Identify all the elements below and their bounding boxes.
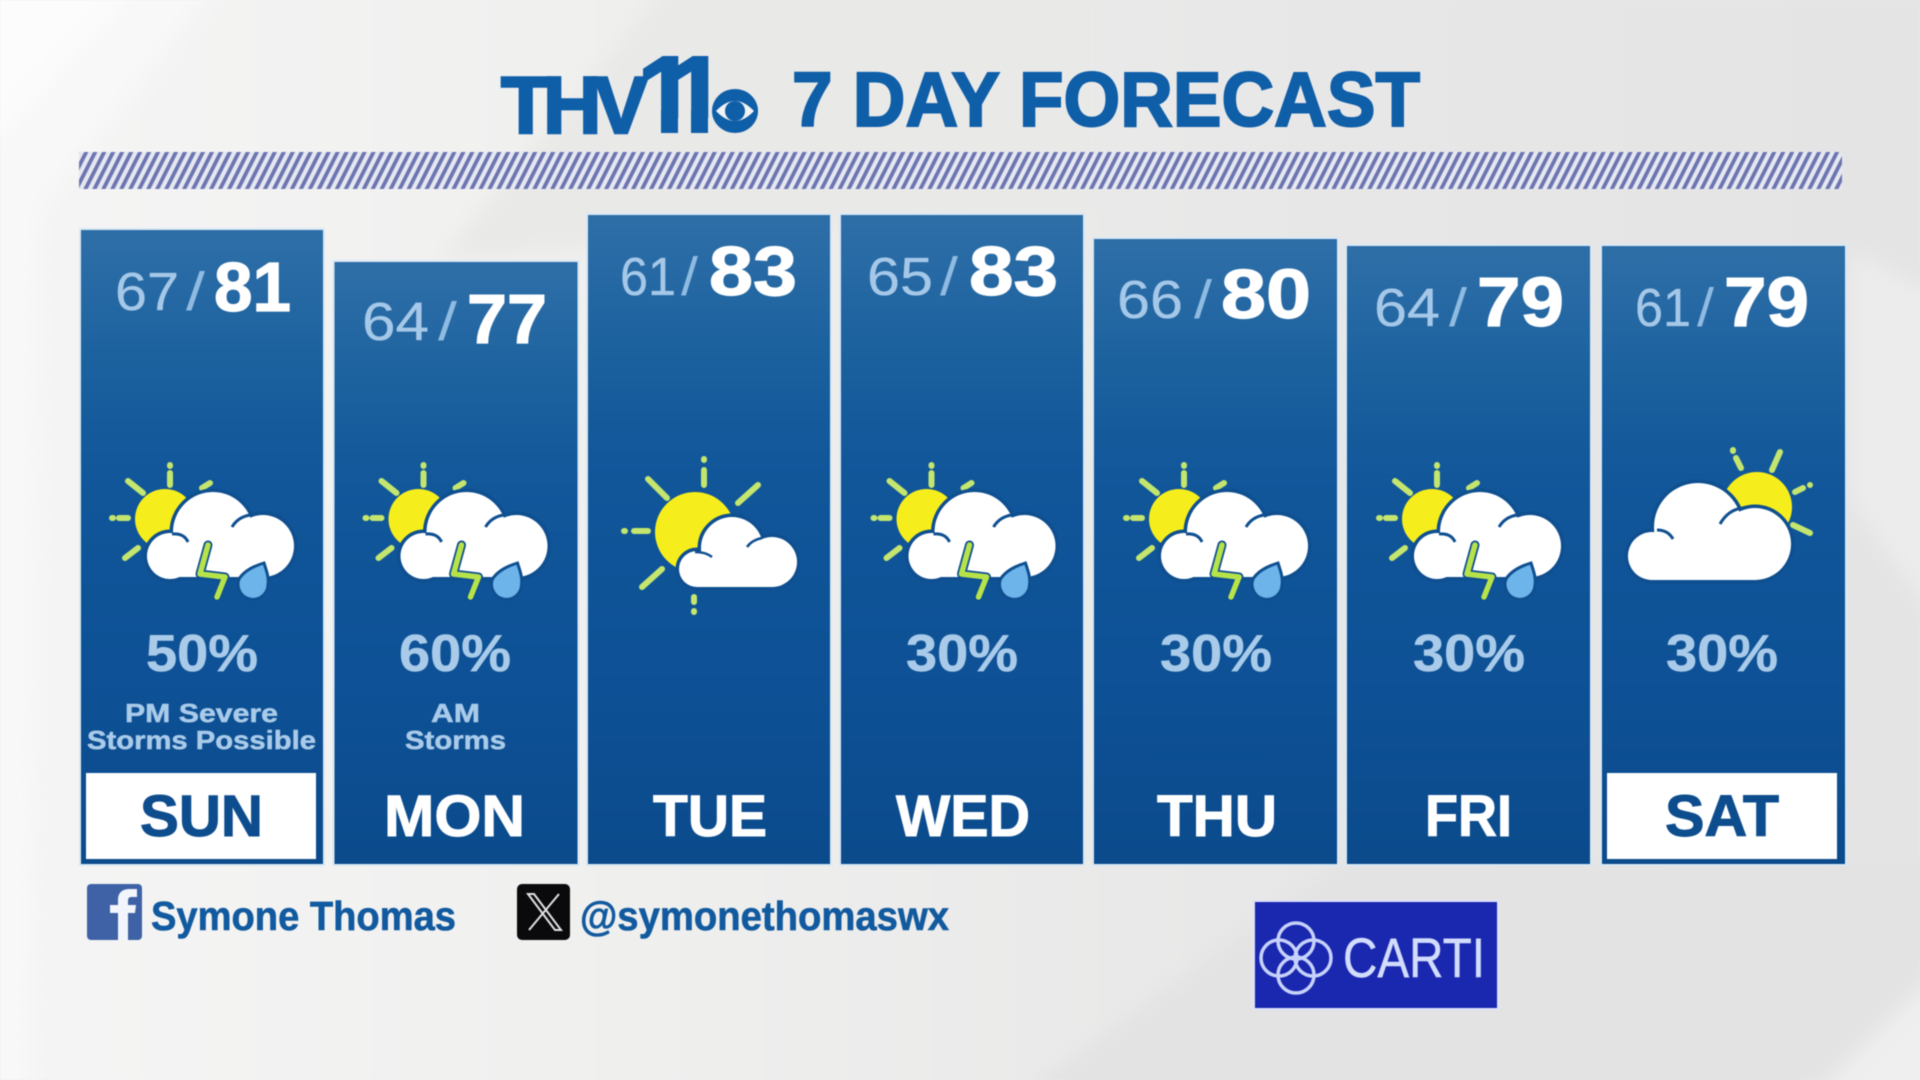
temperatures: Tuesday: 61 <box>620 247 676 307</box>
day label: SUN: SUN <box>140 784 263 849</box>
panel: Sunday <box>80 229 324 865</box>
note: Sunday: Storms Possible <box>87 725 316 755</box>
day label: FRI: FRI <box>1425 784 1512 849</box>
precipitation: Sunday: 50% <box>146 625 258 683</box>
temperatures: Sunday: / <box>186 262 205 322</box>
panel: Tuesday <box>587 214 831 865</box>
Facebook name: Symone Thomas <box>151 893 456 939</box>
temperatures: Monday: 64 <box>362 292 429 352</box>
temperatures: Saturday: 79 <box>1724 263 1809 341</box>
icon: storm Thursday <box>1126 465 1308 599</box>
icon: storm Friday <box>1379 465 1561 599</box>
temperatures: Tuesday: / <box>681 247 698 307</box>
header logo: THV11 CBS: THV <box>501 61 648 151</box>
day label: SAT <box>1607 773 1837 859</box>
title: 7 DAY FORECAST <box>792 57 1420 143</box>
icon: partly cloudy Tuesday <box>624 459 797 612</box>
temperatures: Thursday: 66 <box>1117 270 1183 330</box>
temperatures: Wednesday: 65 <box>867 247 933 307</box>
temperatures: Friday: 79 <box>1477 263 1564 341</box>
note: Sunday <box>87 698 316 755</box>
temperatures: Monday: 77 <box>467 280 547 358</box>
temperatures: Monday <box>362 280 547 358</box>
temperatures: Thursday <box>1117 255 1311 333</box>
temperatures: Saturday: 61 <box>1635 278 1691 338</box>
panel: Wednesday <box>840 214 1084 865</box>
CARTI wordmark: CARTI <box>1343 926 1485 989</box>
temperatures: Wednesday: / <box>940 247 958 307</box>
day label: WED: WED <box>896 784 1030 849</box>
panel: Saturday <box>1601 245 1846 865</box>
note: Monday <box>405 698 506 755</box>
icon: partly cloudy Saturday <box>1628 450 1810 580</box>
note: Monday: AM <box>431 698 480 728</box>
icon: storm Monday <box>366 465 548 599</box>
hatched divider <box>79 152 1842 189</box>
panel: Monday <box>334 261 578 865</box>
temperatures: Tuesday: 83 <box>709 232 797 310</box>
icon: Facebook <box>87 884 142 940</box>
temperatures: Wednesday: 83 <box>969 232 1058 310</box>
panel: Friday <box>1346 245 1591 865</box>
temperatures: Wednesday <box>867 232 1058 310</box>
precipitation: Saturday: 30% <box>1666 625 1778 683</box>
icon: X <box>517 884 570 940</box>
icon: CARTI knot <box>1261 923 1331 993</box>
temperatures: Thursday: / <box>1194 270 1212 330</box>
precipitation: Wednesday: 30% <box>906 625 1018 683</box>
panel: Thursday <box>1093 238 1338 865</box>
day label: TUE: TUE <box>653 784 767 849</box>
day label: MON: MON <box>384 784 525 849</box>
day label: THU: THU <box>1157 784 1277 849</box>
temperatures: Friday: / <box>1449 278 1467 338</box>
sponsor logo: CARTI <box>1254 901 1498 1009</box>
precipitation: Monday: 60% <box>399 625 511 683</box>
icon: storm Sunday <box>112 465 294 599</box>
icon: storm Wednesday <box>874 465 1056 599</box>
note: Monday: Storms <box>405 725 506 755</box>
day label: SUN <box>86 773 316 859</box>
temperatures: Tuesday <box>620 232 797 310</box>
temperatures: Sunday: 67 <box>115 262 179 322</box>
precipitation: Thursday: 30% <box>1160 625 1272 683</box>
header logo: THV11 CBS: 11 <box>636 34 728 157</box>
temperatures: Saturday <box>1635 263 1809 341</box>
note: Sunday: PM Severe <box>125 698 278 728</box>
precipitation: Friday: 30% <box>1413 625 1525 683</box>
temperatures: Thursday: 80 <box>1221 255 1311 333</box>
temperatures: Friday: 64 <box>1374 278 1440 338</box>
header logo: THV11 CBS <box>500 55 759 136</box>
X handle: @symonethomaswx <box>580 893 949 939</box>
temperatures: Monday: / <box>438 292 457 352</box>
day label: SAT: SAT <box>1665 784 1779 849</box>
temperatures: Saturday: / <box>1697 278 1714 338</box>
temperatures: Sunday: 81 <box>214 248 291 326</box>
temperatures: Friday <box>1374 263 1564 341</box>
temperatures: Sunday <box>115 248 291 326</box>
